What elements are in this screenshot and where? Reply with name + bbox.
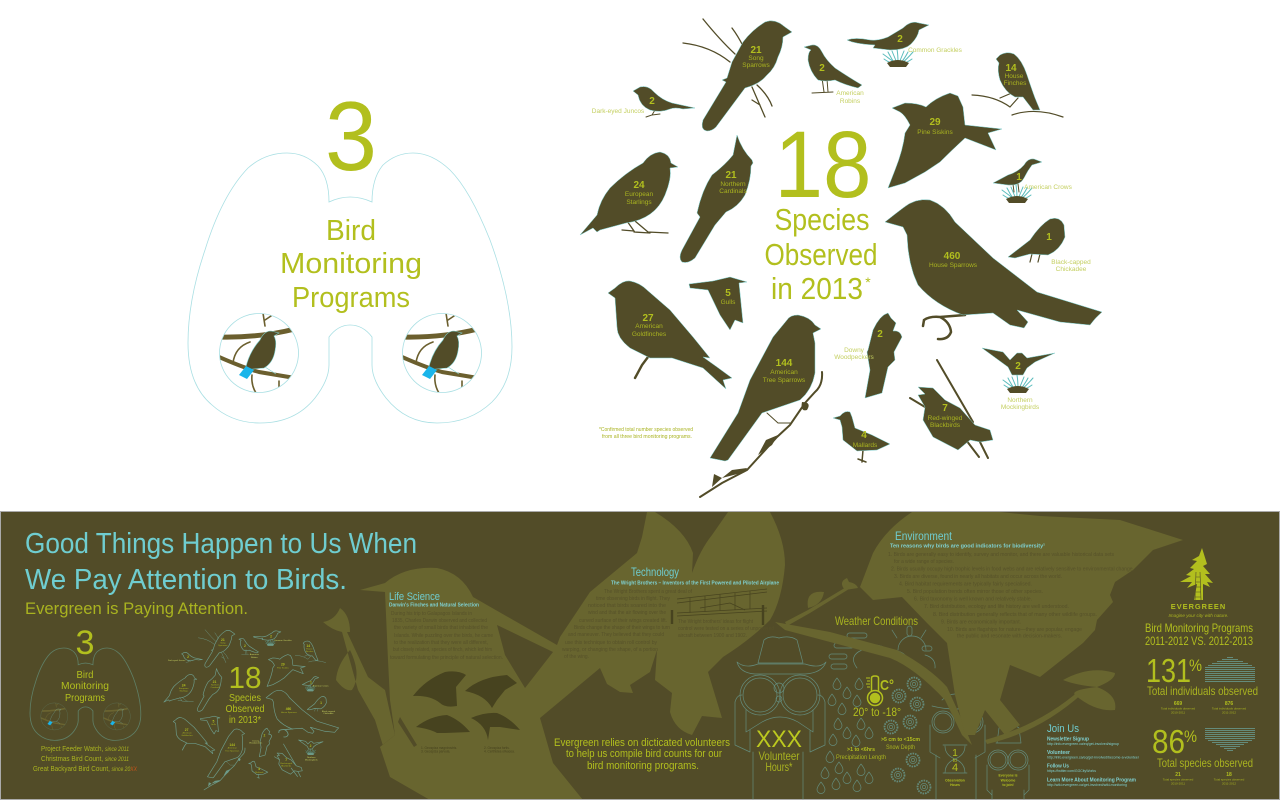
text: mini Bird Monitoring Programs xyxy=(61,669,109,704)
number: mini 18: 18 xyxy=(228,660,262,695)
text: mini species observed xyxy=(226,692,265,726)
body text: but closely related, species of finch, which led him xyxy=(393,647,492,653)
silhouette: large environment bird xyxy=(860,512,1183,735)
background bird silhouettes on branches xyxy=(323,512,1183,800)
stat: observation hours xyxy=(945,748,965,787)
links: Volunteer xyxy=(1047,750,1071,756)
icon: Wright flyer airplane xyxy=(672,589,767,625)
panel: 18 species observed bird cluster xyxy=(580,19,1102,497)
wordmark: EVERGREEN xyxy=(1171,602,1226,611)
values: 876 xyxy=(1225,701,1233,707)
label: snow depth: Snow Depth xyxy=(886,745,915,751)
values: Total individuals observed xyxy=(1212,706,1247,710)
icon: snowflakes xyxy=(884,678,930,794)
list: ten reasons: for a wide range of species. xyxy=(894,559,954,565)
icon: mini binoculars xyxy=(30,648,141,740)
text: Evergreen relies on volunteers: Evergreen relies on dicticated volunteers xyxy=(554,737,730,749)
section: Join Us xyxy=(1047,723,1140,787)
stat: observation hours: Hours xyxy=(950,783,960,787)
body text: of the wing. xyxy=(564,654,589,660)
stat: volunteer hours: XXX xyxy=(756,726,802,753)
icon: small volunteer with hourglass xyxy=(930,694,985,799)
list: ten reasons: 7. Bird distribution, ecology and life history are well understood. xyxy=(924,604,1069,610)
body text: wind and that the air flowing over the xyxy=(587,610,666,616)
values: 2011-2012 xyxy=(1222,782,1236,786)
stat: 131 percent individuals: % xyxy=(1189,656,1202,675)
list: programs: Project Feeder Watch, since 2011 xyxy=(41,744,129,753)
values xyxy=(1161,701,1247,714)
finch captions xyxy=(421,746,515,754)
text: mini species observed: Species xyxy=(229,692,261,704)
stat: volunteer hours: Volunteer xyxy=(758,749,800,763)
body text: warping, or changing the shape, of a portion xyxy=(561,647,658,653)
mini binoculars panel xyxy=(30,624,141,773)
section: Life Science xyxy=(389,591,515,754)
stat: volunteer hours xyxy=(756,726,802,774)
icon: binoculars outline with bird scopes xyxy=(188,153,512,423)
subheading: Evergreen is Paying Attention: Evergreen is Paying Attention. xyxy=(25,599,248,618)
dark gaps between silhouettes xyxy=(398,625,553,747)
number: 131 xyxy=(1146,652,1191,689)
list: ten reasons xyxy=(888,552,1134,640)
stat: observation hours: to xyxy=(953,758,957,764)
values: 2010-2011 xyxy=(1171,710,1185,714)
body text: aircraft between 1900 and 1902. xyxy=(678,633,747,639)
chart: stacked stripes pyramid xyxy=(1205,658,1255,682)
body text: and maneuver. They believed that they could xyxy=(568,632,664,638)
body text xyxy=(390,611,503,661)
icon: thermometer xyxy=(866,676,882,706)
label: temperature range: 20° to -18° xyxy=(853,705,901,719)
body text: use this technique to obtain roll control by xyxy=(565,640,657,646)
heading: Good Things Happen: We Pay Attention to Birds. xyxy=(25,564,347,596)
body text: control were tested on a series of unpowered xyxy=(678,626,774,632)
text: everyone is welcome: Everyone is xyxy=(998,774,1018,778)
links: http://info.evergreen.ca/eq/get-involved/signup xyxy=(1047,742,1119,746)
values: Total species observed xyxy=(1163,778,1194,782)
heading: Bird Monitoring Programs: Bird xyxy=(326,215,376,247)
heading: Environment xyxy=(895,529,953,543)
body text: During his trip to Galapagos Islands in xyxy=(391,611,472,617)
icon: rain drops xyxy=(817,678,873,794)
section: Weather Conditions xyxy=(835,614,920,761)
links: Newsletter Signup xyxy=(1047,736,1090,742)
text: Evergreen relies on volunteers xyxy=(554,737,730,772)
stat: observation hours: Observation xyxy=(945,778,965,782)
bird silhouettes with counts xyxy=(580,19,1102,497)
chart: stacked stripes inverted pyramid xyxy=(1205,728,1255,750)
body text: curved surface of their wings created lift. xyxy=(579,618,667,624)
values: 669 xyxy=(1174,701,1182,707)
heading: programs comparison xyxy=(1145,621,1253,648)
label: degrees C: C° xyxy=(880,677,894,694)
stat: 131 percent individuals xyxy=(1146,652,1258,714)
heading: Weather Conditions xyxy=(835,614,918,628)
panel: Good Things Happen background xyxy=(0,512,1280,800)
body text: The Wright Brothers spent a great deal of xyxy=(604,589,692,595)
text: everyone is welcome: Welcome xyxy=(1001,778,1016,782)
text: mini Bird Monitoring Programs: Monitoring xyxy=(61,680,109,692)
silhouette: leafy branch left xyxy=(323,608,395,744)
text: everyone is welcome xyxy=(998,774,1018,787)
icon: small volunteer welcome xyxy=(987,724,1029,799)
body text: time observing birds in flight. They xyxy=(596,596,670,602)
footnote: from all three bird monitoring programs. xyxy=(602,434,692,440)
values: 21 xyxy=(1175,772,1181,778)
heading: Bird Monitoring Programs xyxy=(280,215,422,314)
finch captions: 1. Geospiza magnirostris. xyxy=(421,746,457,750)
stat: 86 percent species xyxy=(1152,723,1255,786)
stat: volunteer hours: Hours* xyxy=(766,760,793,774)
links: http://wiki.evergreen.ca/get-involved/wiki-monitoring xyxy=(1047,783,1127,787)
icon: tree with ladder xyxy=(1180,548,1213,600)
subheading: The Wright Brothers – Inventors of the First Powered and Piloted Airplane xyxy=(611,580,779,586)
body text: the variety of small birds that inhabited the xyxy=(394,625,488,631)
heading: Bird Monitoring Programs: Monitoring xyxy=(280,248,422,280)
text: mini species observed: Observed xyxy=(226,703,265,715)
label: precipitation length: >1 to <6hrs xyxy=(847,747,875,753)
stat: 86 percent species: % xyxy=(1184,727,1197,746)
icon: volunteer figure with hat and binoculars xyxy=(735,637,826,799)
silhouette: finch and perched birds xyxy=(360,512,785,800)
heading: Species Observed in 2013 xyxy=(764,202,878,306)
footnote xyxy=(599,427,693,440)
list: ten reasons: 3. Birds are diverse, found in nearly all habitats and occur across the world. xyxy=(894,574,1062,580)
body text: noticed that birds soared into the xyxy=(588,603,666,609)
panel: three bird monitoring programs binoculars xyxy=(188,81,512,423)
list: ten reasons: 10. Birds are flagships for nature—they are popular, engage xyxy=(947,627,1082,633)
text: everyone is welcome: to join! xyxy=(1002,783,1014,787)
list: ten reasons: 6. Bird taxonomy is well known and relatively stable. xyxy=(914,596,1032,602)
icon: Darwin's finch heads xyxy=(413,671,520,740)
stat: observation hours: 4 xyxy=(952,762,958,774)
silhouette: lower right leaf branch xyxy=(985,670,1115,744)
list: ten reasons: 8. Bird distribution generally reflects that of many other wildlife groups. xyxy=(933,612,1097,618)
label: snow depth: >5 cm to <15cm xyxy=(881,737,920,743)
heading: Join Us xyxy=(1047,723,1079,735)
links: Learn More About Monitoring Program xyxy=(1047,778,1136,784)
subheading: Darwin's Finches and Natural Selection xyxy=(389,602,480,608)
heading: Bird Monitoring Programs: Programs xyxy=(292,282,410,314)
heading: Life Science xyxy=(389,591,440,603)
list: programs: Great Backyard Bird Count, since 20XX xyxy=(33,764,138,773)
values: Total species observed xyxy=(1214,778,1245,782)
body text: 1835, Charles Darwin observed and collected xyxy=(392,618,487,624)
heading: programs comparison: Bird Monitoring Programs xyxy=(1145,621,1253,635)
links xyxy=(1047,736,1140,787)
list: ten reasons: 2. Birds usually occupy high trophic levels in food webs and are relatively sensitive to environmental change. xyxy=(891,566,1134,572)
subheading: Ten reasons why birds are good indicators for biodiversity¹ xyxy=(890,542,1045,550)
list: programs xyxy=(33,744,138,773)
text: Evergreen relies on volunteers: bird monitoring programs. xyxy=(587,760,699,772)
list: ten reasons: 1. Birds are generally easy to identify, survey and monitor, and there are valuable historical data sets xyxy=(888,552,1114,558)
body text: Birds change the shape of their wings to turn xyxy=(574,625,670,631)
text: mini species observed: in 2013* xyxy=(229,714,261,726)
values: 18 xyxy=(1226,772,1232,778)
values: Total individuals observed xyxy=(1161,706,1196,710)
text: Evergreen relies on volunteers: to help us compile bird counts for our xyxy=(566,748,722,760)
list: ten reasons: 4. Bird habitat requirements are typically fairly specialised. xyxy=(899,582,1032,588)
number: 3: 3 xyxy=(325,81,377,191)
finch captions: 4. Certhidea olivacea. xyxy=(484,750,515,754)
finch captions: 2. Geospiza fortis. xyxy=(484,746,510,750)
list: programs: Christmas Bird Count, since 2011 xyxy=(41,754,129,763)
heading: Species Observed in 2013: Observed xyxy=(764,237,878,272)
label: snow depth xyxy=(881,737,920,751)
logo: Evergreen xyxy=(1168,548,1228,618)
footnote: *Confirmed total number species observed xyxy=(599,427,693,433)
label: Total species observed xyxy=(1157,756,1253,770)
values: 2011-2012 xyxy=(1222,710,1236,714)
links: Follow Us xyxy=(1047,764,1069,770)
section: Technology xyxy=(561,565,779,660)
heading: Species Observed in 2013: * xyxy=(865,274,871,290)
heading: Species Observed in 2013: Species xyxy=(774,202,870,237)
label: precipitation length xyxy=(836,747,886,761)
silhouette: branch to the right xyxy=(775,622,972,745)
finch captions: 3. Geospiza parvula. xyxy=(421,750,450,754)
links: http://info.evergreen.ca/eq/get-involved/become-a-volunteer xyxy=(1047,756,1140,760)
list: ten reasons: the public and resonate with decision-makers. xyxy=(957,634,1062,640)
stat: observation hours: 1 xyxy=(952,748,958,759)
body text xyxy=(561,589,774,660)
label: precipitation length: Precipitation Length xyxy=(836,755,886,761)
values xyxy=(1163,772,1245,786)
list: ten reasons: 9. Birds are economically important. xyxy=(941,620,1021,626)
links: https://twitter.com/GGCityWorks xyxy=(1047,769,1096,773)
body text: The Wright brothers' ideas for flight xyxy=(678,619,753,625)
number: 86 xyxy=(1152,723,1185,760)
body text: toward formulating the principle of natural selection. xyxy=(390,655,503,661)
heading: Technology xyxy=(631,565,679,579)
number: mini 3: 3 xyxy=(76,624,94,662)
heading: Good Things Happen xyxy=(25,528,417,596)
body text: to the realization that they were all different, xyxy=(394,640,488,646)
text: mini Bird Monitoring Programs: Programs xyxy=(65,692,105,704)
heading: Species Observed in 2013: in 2013 xyxy=(771,271,863,306)
icon: weather cloud sun and rain pills xyxy=(829,626,935,669)
section: Environment xyxy=(888,529,1134,640)
values: 2010-2011 xyxy=(1171,782,1185,786)
text: mini Bird Monitoring Programs: Bird xyxy=(76,669,94,681)
number: 18: 18 xyxy=(774,112,872,218)
list: ten reasons: 5. Bird population trends often mirror those of other species. xyxy=(907,589,1043,595)
body text: Islands. While puzzling over the birds, he came xyxy=(394,633,493,639)
bird outlines xyxy=(164,630,339,790)
silhouette: leaves xyxy=(785,578,858,626)
tagline: Imagine your city with nature. xyxy=(1168,613,1228,618)
mini species cluster xyxy=(164,630,339,790)
heading: Good Things Happen: Good Things Happen to Us When xyxy=(25,528,417,560)
